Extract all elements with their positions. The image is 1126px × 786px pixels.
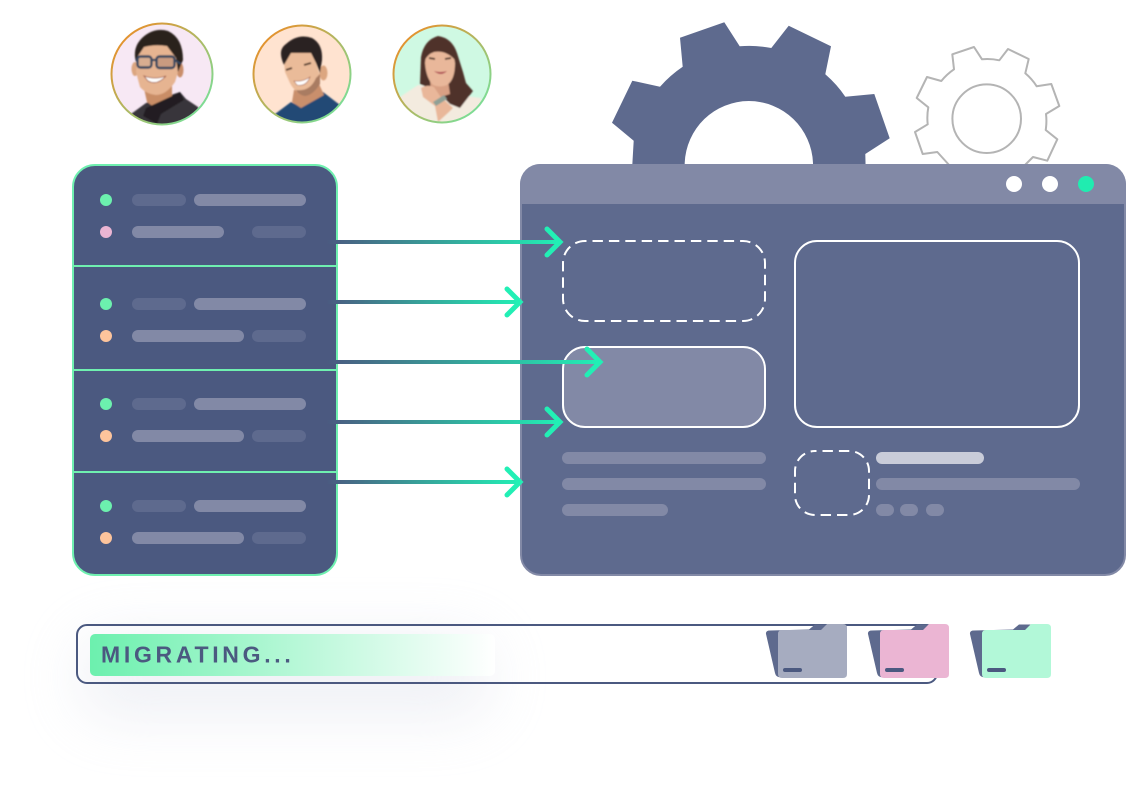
panel: destination application window (520, 164, 1126, 575)
arrow 3 (326, 349, 600, 375)
large content card (795, 241, 1079, 427)
icon: pink folder (868, 624, 949, 678)
highlighted card (563, 347, 765, 427)
window title bar (520, 164, 1126, 204)
row group 1 (100, 194, 306, 238)
dashed placeholder card (563, 241, 765, 321)
portrait: smiling woman (394, 26, 490, 130)
arrow 5 (326, 469, 520, 495)
progress fill (90, 634, 495, 676)
arrow 4 (326, 409, 560, 435)
right text lines (876, 452, 1080, 516)
dashed thumbnail (795, 451, 869, 515)
progress bar (77, 625, 937, 683)
arrow 1 (326, 229, 560, 255)
progress label: MIGRATING... (101, 642, 294, 668)
icon: large gear (612, 22, 890, 170)
icon: grey folder (766, 624, 847, 678)
portrait: man with glasses (112, 24, 212, 130)
window control dots (1006, 176, 1094, 192)
soft shadow under progress bar (80, 637, 490, 717)
icon: green folder (970, 624, 1051, 678)
panel: source server list (73, 165, 337, 575)
portrait: smiling man (254, 26, 350, 130)
row group 4 (100, 500, 306, 544)
row group 2 (100, 298, 306, 342)
row group 3 (100, 398, 306, 442)
icon: small outlined gear (915, 47, 1059, 166)
arrow 2 (326, 289, 520, 315)
left text lines (562, 452, 766, 516)
